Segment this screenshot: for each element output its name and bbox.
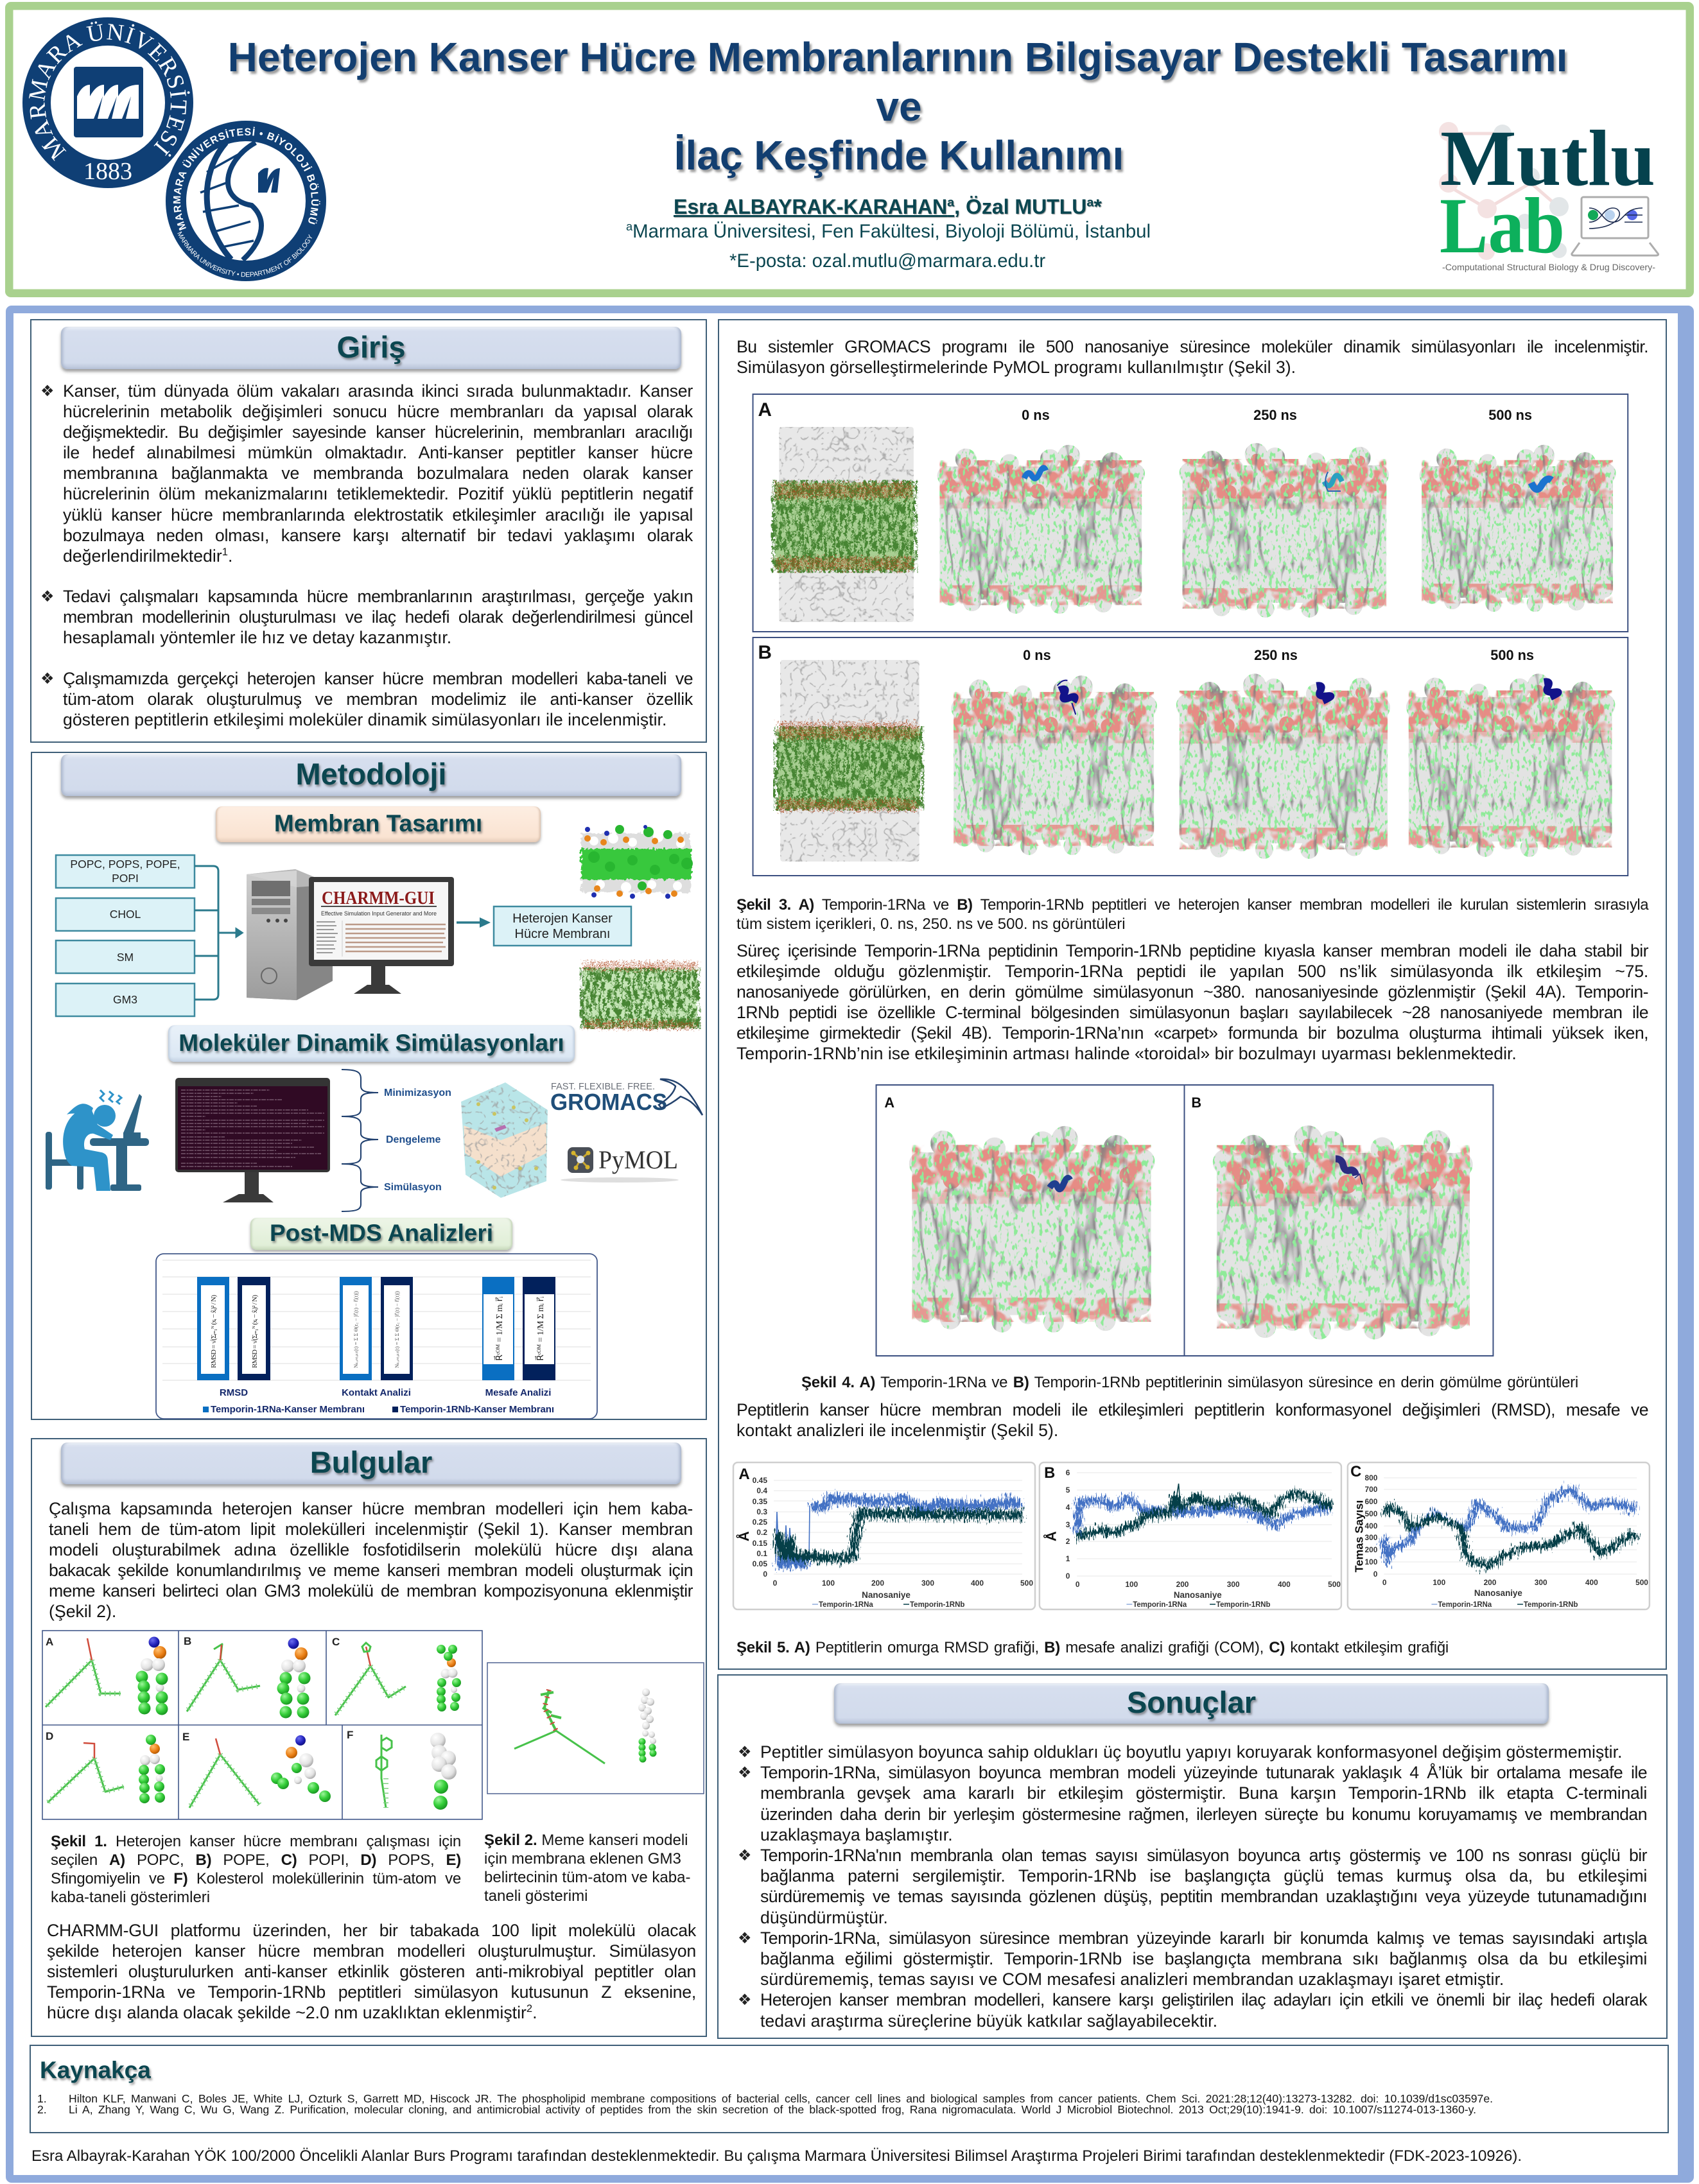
chart: figure 5B distance: 500 [1328, 1580, 1341, 1589]
title: Heterojen Kanser Hücre Membranlarının Bilgisayar Destekli Tasarımı [228, 34, 1567, 80]
text block: intro paragraph 2: hesaplamalı yöntemler ile hız ve detay kazanmıştır. [63, 628, 451, 647]
figure 3 panel A [753, 394, 1628, 632]
chart: figure 5C contacts: Temas Sayısı [1353, 1500, 1366, 1572]
chart: figure 5B distance: 6 [1066, 1468, 1070, 1477]
all-atom membrane [583, 962, 697, 1029]
caption: figure 1: Şekil 1. Heterojen kanser hücre membranı çalışması için [51, 1833, 461, 1850]
logo: Mutlu Lab: Mutlu [1440, 114, 1655, 202]
text block: analyses: kontakt analizleri ile incelenmiştir (Şekil 5). [736, 1420, 1058, 1439]
text block: simulation intro: Bu sistemler GROMACS programı ile 500 nanosaniye süresince moleküler dinamik simülasyonları ile incelenmiştir. [736, 337, 1648, 356]
text block: intro paragraph 3: gösteren peptitlerin etkileşimi moleküler dinamik simülasyonları ile incelenmiştir. [63, 710, 667, 729]
figure 1: lipid molecules: A [46, 1636, 53, 1648]
icon: CHARMM-GUI monitor [309, 877, 454, 994]
chart: figure 5C contacts: 200 [1365, 1545, 1378, 1554]
chart: figure 5B distance: 5 [1066, 1486, 1070, 1495]
figure 3 panel A: 500 ns [1488, 407, 1532, 423]
figure 1: lipid molecules: F [347, 1729, 353, 1741]
logo: Biology Department [166, 121, 326, 281]
icon: computer tower [247, 869, 333, 1000]
chart: figure 5C contacts: 0 [1382, 1578, 1387, 1587]
logo: Mutlu Lab: Lab [1440, 182, 1565, 270]
chart: figure 5A RMSD: 500 [1020, 1579, 1033, 1588]
text block: conclusions: Peptitler simülasyon boyunca sahip oldukları üç boyutlu yapıyı koruyarak konformasyonel değişim göstermemiştir. [760, 1742, 1622, 1762]
text block: findings intro [49, 1499, 693, 1621]
chart: figure 5C contacts: 400 [1585, 1578, 1598, 1587]
panel: simulation results [718, 319, 1667, 1670]
chart: figure 5A RMSD: 200 [871, 1579, 884, 1588]
chart: figure 5C contacts: 500 [1635, 1578, 1648, 1587]
figure 3 panel B [753, 637, 1628, 876]
icon: CHARMM-GUI monitor: Effective Simulation Input Generator and More [321, 910, 437, 917]
text block: intro paragraph 1: membranına bağlanmakta ve membranda bozulmalara neden olarak kanser [63, 464, 693, 483]
title second line: İlaç Keşfinde Kullanımı [674, 132, 1124, 178]
chart: figure 5A RMSD: Nanosaniye [862, 1590, 910, 1600]
heading: Bulgular [61, 1443, 681, 1484]
chart: figure 5A RMSD: 0.35 [753, 1497, 767, 1506]
text block: intro paragraph 1: yüklü kanser hücre membranlarında elektrostatik etkileşimler aracılığı ile yapısal [63, 505, 693, 524]
full system B [778, 660, 920, 862]
caption: figure 1: seçilen A) POPC, B) POPE, C) POPI, D) POPS, E) [51, 1851, 461, 1869]
chart: figure 5B distance: 200 [1176, 1580, 1189, 1589]
chart: figure 5A RMSD: 0.05 [753, 1559, 767, 1568]
chart: figure 5B distance: Nanosaniye [1174, 1590, 1222, 1600]
chart: figure 5A RMSD: 0 [773, 1579, 778, 1588]
chart: figure 5A RMSD: 0.1 [756, 1549, 767, 1558]
text block: findings continued: hücre dışı alanda olacak şekilde ~2.0 nm uzaklıktan eklenmiştir2. [47, 2002, 537, 2022]
chart: post-MDS analyses: Temporin-1RNa-Kanser Membranı [211, 1404, 365, 1415]
text block: findings continued: sistemleri oluşturulurken anti-kanser etkinlik gösteren anti-mikrobiyal peptitler olan [47, 1962, 696, 1981]
panel: Giriş [30, 319, 707, 743]
chart: figure 5A RMSD: 0.3 [756, 1507, 767, 1516]
chart: post-MDS analyses [156, 1254, 597, 1419]
figure 1: lipid molecules: B [184, 1635, 191, 1647]
chart: figure 5C contacts: Temporin-1RNa [1438, 1601, 1492, 1609]
subheading: Post-MDS Analizleri: Post-MDS Analizleri [270, 1220, 493, 1246]
text block: conclusions: uzaklaşmaya başlamıştır. [760, 1825, 953, 1844]
text block: intro paragraph 1: Kanser, tüm dünyada ölüm vakaları arasında ikinci sırada bulunmaktadır. Kanser [63, 381, 693, 401]
text block: findings intro: (Şekil 2). [49, 1602, 116, 1621]
text block: conclusions: düşündürmüştür. [760, 1908, 888, 1927]
references [37, 2093, 1508, 2115]
panel: Kaynakça [30, 2045, 1669, 2133]
lipid input boxes: POPC, POPS, POPE, [70, 858, 180, 871]
methodology diagram [46, 825, 704, 1419]
text block: intro paragraph 1: hücrelerinin ölüm mekanizmalarını tetiklemektedir. Pozitif yüklü peptitlerin negatif [63, 484, 693, 503]
text block: intro paragraph 3: tüm-atom olarak oluşturulmuş ve membran modelimiz ile anti-kanser özellik [63, 689, 693, 709]
chart: figure 5B distance: 4 [1066, 1503, 1070, 1512]
text block: intro paragraph 2: Tedavi çalışmaları kapsamında hücre membranlarının araştırılması, gerçeğe yakın [63, 587, 693, 606]
full system A [775, 427, 914, 622]
caption: figure 1 [51, 1833, 461, 1906]
text block: conclusions: Temporin-1RNa'nın membranla olan temas sayısı simülasyon boyunca artış göstermiş ve 100 ns sonrası güçlü bir [760, 1846, 1647, 1865]
caption: figure 4: Şekil 4. A) Temporin-1RNa ve B) Temporin-1RNb peptitlerinin simülasyon süresince en derin gömülme görüntüleri [801, 1374, 1578, 1391]
chart: figure 5C contacts: 400 [1365, 1521, 1378, 1530]
text block: conclusions: tedavi araştırma süreçlerine büyük katkılar sağlayabilecektir. [760, 2011, 1217, 2031]
heading: Kaynakça: Kaynakça [40, 2057, 151, 2083]
text block: peptide interaction: nanosaniyede görülürken, en derin gömülme simülasyonun ~380. nanosaniyesinde gözlenmiştir (Şekil 4A). Temporin- [736, 982, 1648, 1001]
text block: peptide interaction: etkileşime girmektedir (Şekil 4B). Temporin-1RNa’nın «carpet» formunda bir bozulma oluşturma ihtimali yüksek iken, [736, 1023, 1648, 1043]
figure 3 panel A: 0 ns [1022, 407, 1050, 423]
logo: Marmara University: MARMARA ÜNİVERSİTESİ [29, 21, 190, 161]
text block: findings intro: meme kanseri belirteci olan GM3 molekülü de membran kompozisyonuna eklenmiştir [49, 1581, 693, 1600]
caption: figure 3: tüm sistem içerikleri, 0. ns, 250. ns ve 500. ns görüntüleri [736, 915, 1126, 932]
text block: findings continued: şekilde heterojen kanser hücre membran modelleri oluşturulmuştur. Simülasyon [47, 1941, 696, 1961]
logo: PyMOL [561, 1145, 679, 1183]
logo: Biology Department: MARMARA ÜNİVERSİTESİ • BİYOLOJİ BÖLÜMÜ [173, 127, 320, 231]
coarse-grained membrane [581, 825, 693, 899]
text block: intro paragraph 1: hücrelerinin metabolik değişimleri sonucu hücre membranları da yapısal olarak [63, 402, 693, 421]
text block: intro paragraph 1: bozulmaya neden olması, kansere karşı alternatif bir tedavi yaklaşımı olarak [63, 526, 693, 545]
chart: figure 5C contacts: 300 [1535, 1578, 1547, 1587]
logo: PyMOL: PyMOL [598, 1145, 678, 1174]
caption: figure 5: Şekil 5. A) Peptitlerin omurga RMSD grafiği, B) mesafe analizi grafiği (COM), C) kontakt etkileşim grafiği [736, 1639, 1449, 1656]
logo: GROMACS: GROMACS [550, 1089, 667, 1115]
panel: Sonuçlar: ❖ [738, 1846, 752, 1864]
logo: GROMACS [550, 1079, 702, 1115]
text block: conclusions: Heterojen kanser membran modelleri, kansere karşı geliştirilen ilaç adayları için etkili ve önemli bir ilaç hedefi olarak [760, 1990, 1647, 2009]
panel: Sonuçlar: ❖ [738, 1929, 752, 1947]
logos [22, 17, 1659, 281]
figure 1: lipid molecules: D [46, 1730, 53, 1742]
lipid input boxes [56, 855, 195, 1016]
text block: peptide interaction: Temporin-1RNb’nin ise etkileşiminin artması halinde «toroidal» bir bozulmayı uyarması beklenmektedir. [736, 1044, 1517, 1063]
chart: figure 5A RMSD: 100 [822, 1579, 835, 1588]
references: 1. [37, 2092, 47, 2105]
text block: conclusions: Temporin-1RNa, simülasyon süresince membran yüzeyinde kararlı bir konumda kalmış ve temas sayısındaki artışla [760, 1928, 1647, 1948]
text block: conclusions: bağlanma eğilimi göstermiştir. Temporin-1RNb ise başlangıçta membrana sıkı bağlanmış olsa da bu etkileşimi [760, 1949, 1647, 1968]
text block: intro paragraph 1: ile hedef alınabilmesi mümkün olmaktadır. Anti-kanser peptitler kanser hücre [63, 443, 693, 462]
chart: figure 5B distance: Temporin-1RNb [1216, 1601, 1270, 1609]
chart: figure 5A RMSD: 0.4 [756, 1486, 767, 1495]
panel: Giriş: ❖ [40, 382, 55, 400]
chart: figure 5C contacts: C [1350, 1463, 1361, 1480]
chart: figure 5B distance: 3 [1066, 1520, 1070, 1529]
icon: CHARMM-GUI monitor: CHARMM-GUI [322, 888, 435, 908]
chart: figure 5A RMSD: 0.25 [753, 1518, 767, 1527]
references: Hilton KLF, Manwani C, Boles JE, White LJ, Ozturk S, Garrett MD, Hiscock JR. The phospholipid membrane compositions of bacterial cells, cancer cell lines and biological samples from cancer patients. Chem Sci. 2021:28;12(40):13273-13282. doi: 10.1039/d1sc03597e. [69, 2092, 1493, 2105]
chart: figure 5B distance [1040, 1462, 1341, 1609]
figure 3 panel A: A [758, 399, 772, 420]
chart: post-MDS analyses: R⃗ᶜᴼᴹ = 1/M Σ mᵢ r⃗ᵢ [493, 1296, 505, 1361]
chart: figure 5B distance: 300 [1227, 1580, 1240, 1589]
text block: intro paragraph 2: membran modellerinin oluşturulması ve ilaç hedefi olarak değerlendirilmesi güncel [63, 607, 693, 627]
text block: conclusions [760, 1742, 1647, 2031]
chart: figure 5A RMSD: Temporin-1RNb [910, 1601, 964, 1609]
figure 1: lipid molecules: C [332, 1636, 340, 1648]
figure 4: A [884, 1095, 894, 1111]
chart: post-MDS analyses: Mesafe Analizi [485, 1387, 551, 1398]
simulation stage labels: Dengeleme [386, 1134, 440, 1145]
chart: post-MDS analyses: Nₖₒₙₜₐₖₜ(t) = Σ Σ Θ(r꜀ − |r⃗ᵢ(t) − r⃗ⱼ(t)|) [353, 1291, 359, 1368]
heading: Sonuçlar [834, 1683, 1549, 1724]
chart: figure 5B distance: 0 [1066, 1572, 1070, 1581]
figure 3 panel B: 250 ns [1254, 647, 1298, 663]
chart: figure 5A RMSD: Temporin-1RNa [819, 1601, 873, 1609]
figure 4 [876, 1085, 1493, 1356]
chart: post-MDS analyses: Temporin-1RNb-Kanser Membranı [400, 1404, 554, 1415]
caption: figure 2: Şekil 2. Meme kanseri modeli [484, 1832, 688, 1849]
chart: figure 5B distance: Temporin-1RNa [1133, 1601, 1187, 1609]
text block: peptide interaction: etkileşimde olduğu gözlenmiştir. Temporin-1RNa peptidi ile yapılan 500 ns’lik simülasyonda ilk etkileşim ~75. [736, 962, 1648, 981]
chart: figure 5C contacts: 500 [1365, 1509, 1378, 1518]
figure 1: lipid molecules: E [182, 1731, 189, 1743]
text block: intro paragraph 1 [40, 381, 693, 566]
panel: Sonuçlar: ❖ [738, 1764, 752, 1781]
chart: figure 5C contacts: 200 [1484, 1578, 1497, 1587]
text block: peptide interaction: 1RNb peptidi ise özellikle C-terminal bölgesinden simülasyonun başları sayılabilecek ~28 nanosaniyede membran ile [736, 1003, 1648, 1022]
chart: figure 5A RMSD: 0.2 [756, 1528, 767, 1537]
caption: figure 2: belirtecinin tüm-atom ve kaba- [484, 1869, 690, 1886]
text block: analyses [736, 1400, 1648, 1441]
chart: figure 5B distance: 0 [1076, 1580, 1080, 1589]
acknowledgement: Esra Albayrak-Karahan YÖK 100/2000 Öncelikli Alanlar Burs Programı tarafından desteklenmektedir. Bu çalışma Marmara Üniversitesi Bilimsel Araştırma Projeleri Birimi tarafından desteklenmektedir (FDK-2023-10926). [31, 2147, 1522, 2165]
result box: Heterojen Kanser [512, 912, 613, 926]
chart: figure 5A RMSD: 0.15 [753, 1539, 767, 1548]
chart: figure 5A RMSD [733, 1462, 1035, 1609]
logo: Mutlu Lab: -Computational Structural Biology & Drug Discovery- [1442, 263, 1655, 272]
lipid input boxes: SM [117, 951, 134, 964]
icon: stressed researcher [46, 1090, 149, 1191]
heading: Metodoloji [61, 754, 681, 796]
text block: findings intro: bakacak şekilde konumlandırılmış ve meme kanseri membran modeli oluşturmak için [49, 1561, 693, 1580]
caption: figure 2 [484, 1832, 690, 1905]
figure 1: lipid molecules [42, 1631, 605, 1819]
chart: figure 5C contacts: 300 [1365, 1533, 1378, 1542]
simulation box [461, 1082, 548, 1198]
panel: Giriş: ❖ [40, 670, 55, 688]
text block: intro paragraph 1: değerlendirilmektedir1. [63, 546, 232, 566]
text block: intro paragraph 3: Çalışmamızda gerçekçi heterojen kanser hücre membran modelleri kaba-taneli ve [63, 669, 693, 688]
caption: figure 2: taneli gösterimi [484, 1887, 588, 1905]
chart: figure 5A RMSD: 300 [921, 1579, 934, 1588]
panel: Metodoloji [31, 752, 707, 1420]
logo: Biology Department: MARMARA UNIVERSITY • DEPARTMENT OF BIOLOGY [177, 231, 312, 277]
panel: Sonuçlar: ❖ [738, 1991, 752, 2009]
chart: figure 5B distance: Å [1043, 1531, 1059, 1541]
title connector: ve [876, 83, 922, 130]
chart: figure 5C contacts: 700 [1365, 1485, 1378, 1494]
heading: Sonuçlar: Sonuçlar [1127, 1685, 1256, 1719]
chart: post-MDS analyses: R⃗ᶜᴼᴹ = 1/M Σ mᵢ r⃗ᵢ [534, 1296, 546, 1361]
subheading: Membran Tasarımı [216, 806, 541, 842]
simulation stage labels [384, 1088, 451, 1193]
simulation stage labels: Minimizasyon [384, 1088, 451, 1098]
text block: findings intro: Çalışma kapsamında heterojen kanser hücre membran modelleri için hem kaba- [49, 1499, 693, 1518]
chart: figure 5B distance: 2 [1066, 1537, 1070, 1546]
caption: figure 3 [736, 896, 1648, 933]
lipid input boxes: POPI [112, 872, 139, 885]
chart: post-MDS analyses: RMSD = √(Σᵢ₌₁ᴺ (xᵢ − x̂ᵢ)² / N) [251, 1295, 259, 1368]
header panel [5, 2, 1694, 297]
logo: Mutlu Lab [1439, 114, 1658, 272]
chart: figure 5C contacts: 0 [1373, 1570, 1378, 1579]
icon: terminal monitor [175, 1078, 330, 1202]
chart: figure 5B distance: 1 [1066, 1554, 1070, 1563]
chart: post-MDS analyses: RMSD [220, 1387, 248, 1398]
authors: Esra ALBAYRAK-KARAHANa, Özal MUTLUa* [674, 195, 1102, 218]
figure 3 panel B: 500 ns [1490, 647, 1534, 663]
subheading: Post-MDS Analizleri [250, 1218, 512, 1250]
chart: figure 5C contacts: Nanosaniye [1474, 1588, 1522, 1598]
panel: Bulgular [31, 1438, 707, 2037]
chart: post-MDS analyses: Nₖₒₙₜₐₖₜ(t) = Σ Σ Θ(r꜀ − |r⃗ᵢ(t) − r⃗ⱼ(t)|) [394, 1291, 400, 1368]
references: 2. [37, 2103, 47, 2116]
simulation stage labels: Simülasyon [384, 1182, 442, 1193]
connector arrow [195, 866, 242, 1000]
text block: conclusions: membranla gevşek ama kararlı bir etkileşim göstermiştir. Buna karşın Temporin-1RNb ilk etapta C-terminali [760, 1783, 1647, 1803]
chart: figure 5A RMSD: 0 [763, 1570, 767, 1579]
chart: figure 5B distance: B [1044, 1464, 1055, 1482]
text block: findings continued: Temporin-1RNa ve Temporin-1RNb peptitleri simülasyon kutusunun Z eksenine, [47, 1982, 696, 2002]
figure 2: GM3 molecule [487, 1663, 704, 1794]
panel: Sonuçlar [717, 1674, 1668, 2039]
caption: figure 1: kaba-taneli gösterimleri [51, 1889, 210, 1906]
text block: conclusions: üzerinden daha derin bir yerleşim göstermesine rağmen, ilerleyen süreçte bu konumu koruyamamış ve membrandan [760, 1805, 1647, 1824]
chart: figure 5A RMSD: 0.45 [753, 1476, 767, 1485]
text block: conclusions: Temporin-1RNa, simülasyon boyunca membran modeli yüzeyinde tutunarak yaklaşık 4 Å’lük bir ortalama mesafe ile [760, 1763, 1647, 1782]
chart: figure 5C contacts: 800 [1365, 1473, 1378, 1482]
references: Li A, Zhang Y, Wang C, Wu G, Wang Z. Purification, molecular cloning, and antimicrobial activity of peptides from the skin secretion of the black-spotted frog, Rana nigromaculata. World J Microbiol Biotechnol. 2013 Oct;29(10):1941-9. doi: 10.1007/s11274-013-1360-y. [69, 2103, 1476, 2116]
text block: conclusions: sürdürememiş, temas sayısı ve COM mesafesi analizleri membrandan uzaklaşmayı işaret etmiştir. [760, 1970, 1504, 1989]
lipid input boxes: GM3 [113, 993, 137, 1006]
arrow [457, 917, 491, 928]
chart: figure 5C contacts [1348, 1462, 1650, 1609]
heading: Giriş: Giriş [336, 330, 406, 364]
caption: figure 2: için membrana eklenen GM3 [484, 1850, 681, 1868]
subheading: Moleküler Dinamik Simülasyonları: Moleküler Dinamik Simülasyonları [179, 1030, 564, 1056]
chart: post-MDS analyses: RMSD = √(Σᵢ₌₁ᴺ (xᵢ − x̂ᵢ)² / N) [210, 1295, 218, 1368]
text block: intro paragraph 2 [40, 587, 693, 647]
panel: Giriş: ❖ [40, 587, 55, 605]
figures 1 and 2 [42, 1630, 704, 1820]
chart: post-MDS analyses: Kontakt Analizi [342, 1387, 411, 1398]
result box: Hücre Membranı [515, 927, 610, 941]
figure 3 panel B: B [758, 642, 772, 663]
chart: figure 5B distance: 100 [1125, 1580, 1138, 1589]
text block: intro paragraph 3 [40, 669, 693, 729]
simulation stage braces [342, 1070, 378, 1211]
lipid input boxes: CHOL [110, 908, 141, 921]
subheading: Moleküler Dinamik Simülasyonları [168, 1025, 575, 1062]
chart: figure 5C contacts: 100 [1365, 1557, 1378, 1566]
heading: Giriş [61, 327, 681, 369]
affiliation: aMarmara Üniversitesi, Fen Fakültesi, Biyoloji Bölümü, İstanbul [626, 220, 1151, 242]
text block: simulation intro: Simülasyon görselleştirmelerinde PyMOL programı kullanılmıştır (Şekil 3). [736, 358, 1296, 377]
text block: conclusions: sürdürememiş ve temas sayısında gözlenen düşüş, peptitin membrandan uzaklaştığını veya yüzeyde tutunamadığını [760, 1887, 1647, 1906]
figures 3, 4 and 5 [718, 319, 1667, 1670]
chart: figure 5A RMSD: Å [735, 1531, 752, 1541]
text block: simulation intro [736, 337, 1648, 377]
heading: Metodoloji: Metodoloji [296, 757, 446, 791]
logo: GROMACS: FAST. FLEXIBLE. FREE. [551, 1082, 655, 1092]
logo: Marmara University: 1883 [83, 158, 132, 185]
text block: peptide interaction: Süreç içerisinde Temporin-1RNa peptidinin Temporin-1RNb peptidine kıyasla kanser membran modeli ile daha stabil bir [736, 941, 1648, 960]
text block: intro paragraph 1: değişmektedir. Bu değişimler sayesinde kanser hücrelerinin, membranları aracılığı [63, 422, 693, 442]
chart: figure 5C contacts: Temporin-1RNb [1524, 1601, 1578, 1609]
chart: figure 5C contacts: 100 [1433, 1578, 1446, 1587]
chart: figure 5A RMSD: 400 [971, 1579, 984, 1588]
chart: figure 5B distance: 400 [1278, 1580, 1291, 1589]
text block: findings continued [47, 1921, 696, 2022]
text block: peptide interaction [736, 941, 1648, 1064]
subheading: Membran Tasarımı: Membran Tasarımı [274, 810, 482, 836]
caption: figure 3: Şekil 3. A) Temporin-1RNa ve B) Temporin-1RNb peptitleri ve heterojen kanser membran modelleri ile kurulan sistemlerin sırasıyla [736, 896, 1648, 914]
caption: figure 1: Sfingomiyelin ve F) Kolesterol moleküllerinin tüm-atom ve [51, 1870, 461, 1887]
email: *E-posta: ozal.mutlu@marmara.edu.tr [729, 250, 1045, 272]
text block: conclusions: bağlanma paterni sergilemiştir. Temporin-1RNb ise başlangıçta güçlü temas kurmuş olsa da, bu etkileşimi [760, 1866, 1647, 1885]
figure 4: B [1191, 1095, 1201, 1111]
panel: Sonuçlar: ❖ [738, 1743, 752, 1761]
result box [494, 906, 631, 946]
chart: figure 5C contacts: 600 [1365, 1497, 1378, 1506]
text block: findings intro: taneli hem de tüm-atom lipit molekülleri incelenmiştir (Şekil 1). Kanser membran [49, 1520, 693, 1539]
text block: analyses: Peptitlerin kanser hücre membran modeli ile etkileşimleri peptitlerin konformasyonel değişimleri (RMSD), mesafe ve [736, 1400, 1648, 1419]
text block: findings intro: modeli oluşturabilmek adına özellikle fosfotidilserin molekülü hücre dışı alana [49, 1540, 693, 1559]
text block: findings continued: CHARMM-GUI platformu üzerinden, her bir tabakada 100 lipit molekülü olacak [47, 1921, 696, 1940]
chart: figure 5A RMSD: A [738, 1466, 750, 1483]
heading: Bulgular: Bulgular [310, 1445, 432, 1479]
figure 3 panel A: 250 ns [1253, 407, 1297, 423]
figure 3 panel B: 0 ns [1023, 647, 1051, 663]
